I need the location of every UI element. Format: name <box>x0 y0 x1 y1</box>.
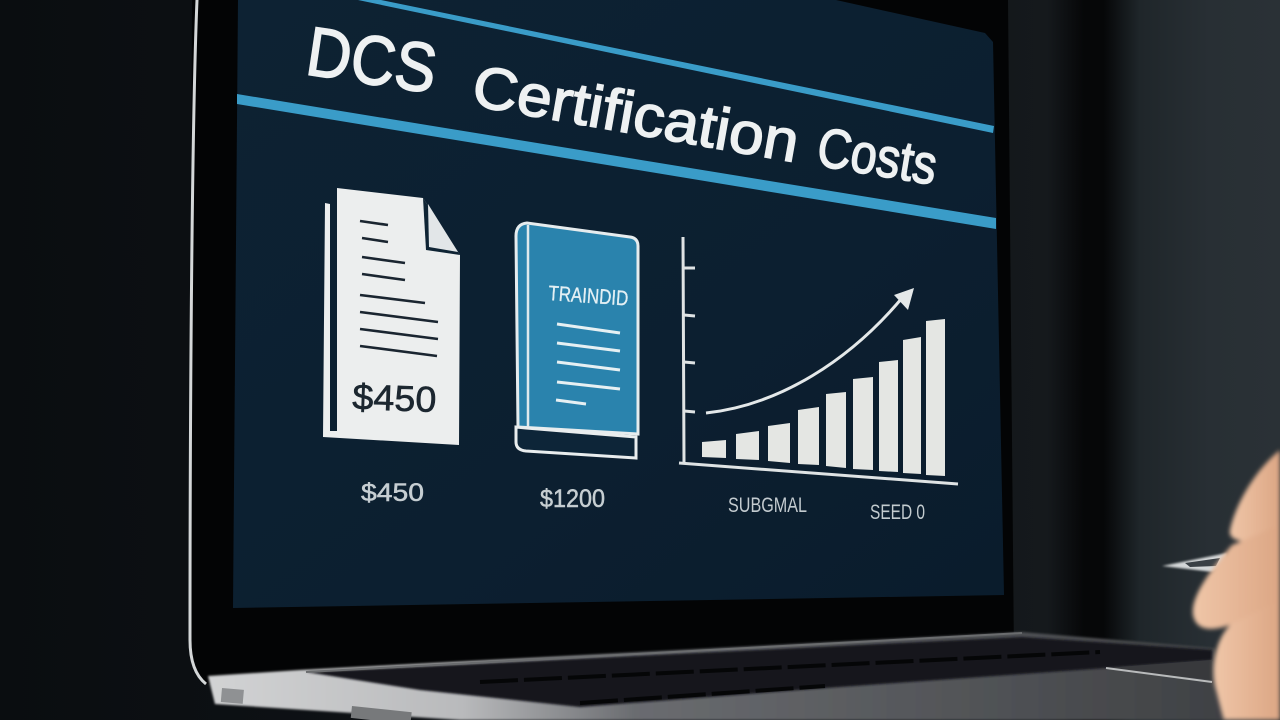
laptop keyboard base <box>208 632 1225 720</box>
icon: document with price <box>323 188 460 445</box>
cost label: $450: $450 <box>361 479 424 507</box>
laptop lid with bezel <box>190 0 1014 684</box>
chart label: subtotal: SUBGMAL <box>728 494 807 517</box>
icon: document with price: $450 <box>352 376 437 420</box>
title <box>302 11 942 197</box>
bar chart with growth arrow <box>679 237 958 484</box>
chart label: step: SEED 0 <box>870 501 925 524</box>
icon: training book <box>516 223 638 458</box>
title: Costs <box>813 115 942 197</box>
title: Certification <box>468 54 804 175</box>
lower blue stripe <box>237 94 996 229</box>
hand holding pen <box>1162 450 1280 720</box>
title: DCS <box>302 11 442 108</box>
icon: training book: TRAINDID <box>548 282 629 311</box>
top blue stripe <box>358 0 994 133</box>
cost label: $1200: $1200 <box>540 485 605 513</box>
laptop screen <box>233 0 1004 608</box>
